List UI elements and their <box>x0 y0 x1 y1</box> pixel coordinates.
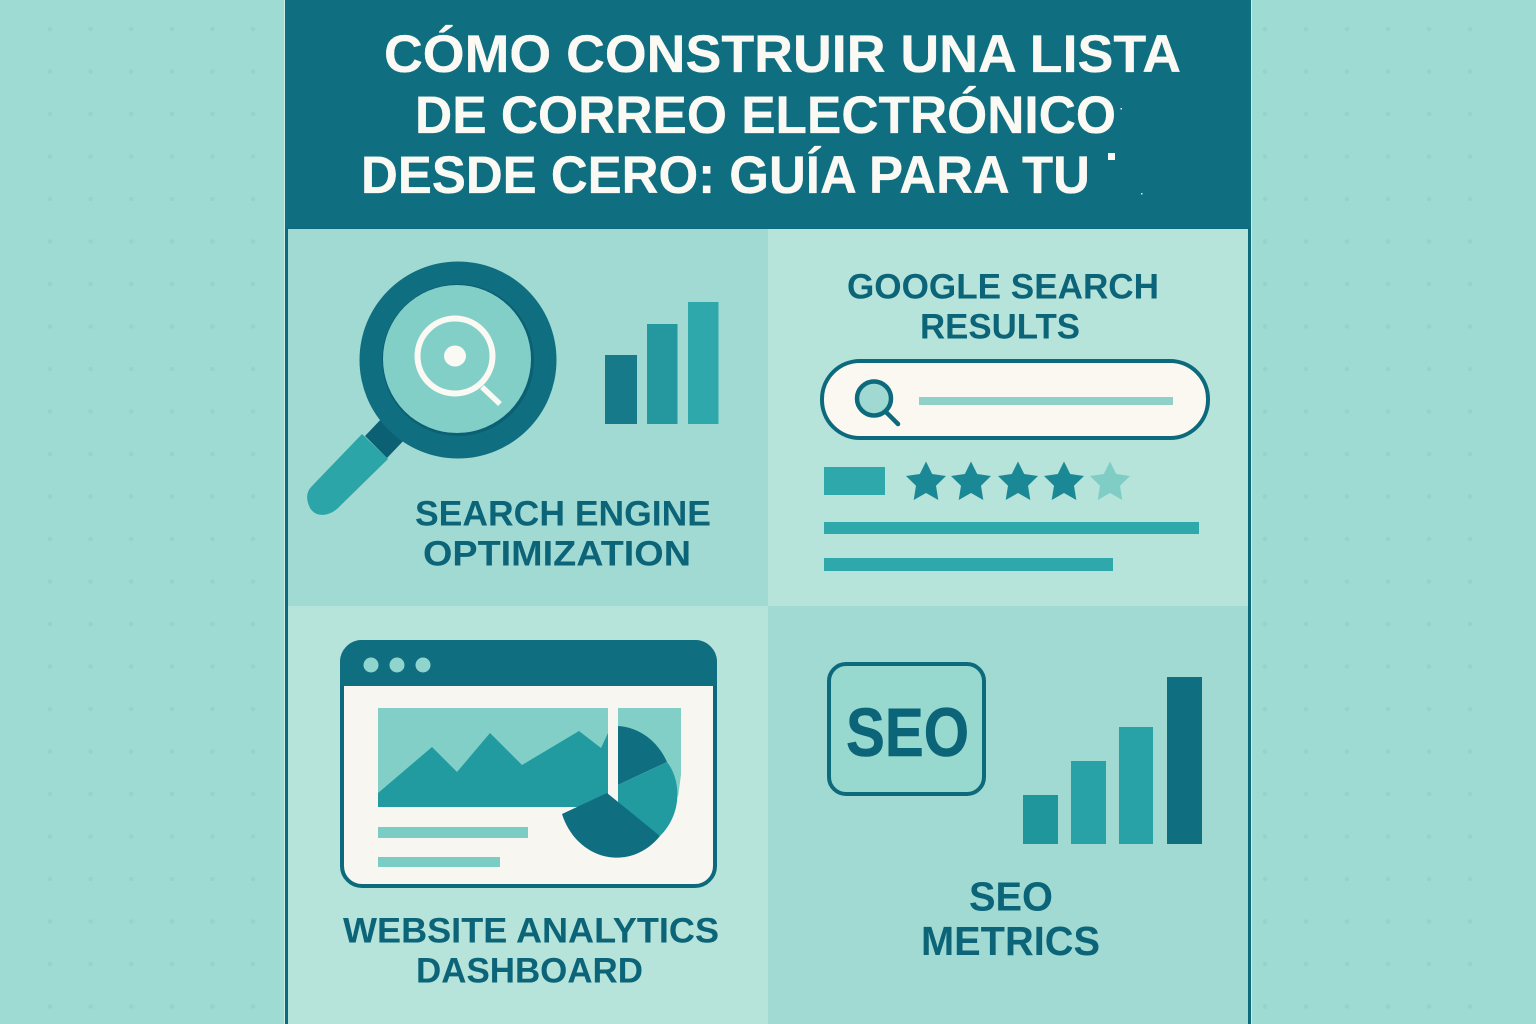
label: seo metrics: SEO <box>969 874 1053 920</box>
label: google search results <box>847 268 1159 346</box>
bar chart: rising bars <box>605 302 718 424</box>
title <box>361 24 1181 205</box>
label: seo metrics: METRICS <box>921 918 1100 964</box>
label: google search results: GOOGLE SEARCH <box>847 268 1159 306</box>
label: website analytics dashboard: WEBSITE ANALYTICS <box>343 912 719 950</box>
result tag <box>824 467 885 495</box>
seo badge <box>829 664 984 794</box>
title: DE CORREO ELECTRÓNICO <box>415 85 1116 145</box>
title: CÓMO CONSTRUIR UNA LISTA <box>384 24 1181 84</box>
area chart <box>378 708 608 807</box>
label: search engine optimization: SEARCH ENGINE <box>415 494 711 534</box>
label: seo metrics <box>921 874 1100 964</box>
panel: seo metrics <box>768 606 1248 1024</box>
panel: search engine optimization <box>288 229 768 606</box>
bar chart: seo growth <box>1023 677 1202 844</box>
panel: website analytics dashboard <box>288 606 768 1024</box>
label: website analytics dashboard: DASHBOARD <box>416 952 643 990</box>
label: google search results: RESULTS <box>920 308 1080 346</box>
pie chart <box>562 708 681 858</box>
label: search engine optimization <box>415 494 711 574</box>
star rating <box>906 462 1130 500</box>
icon: search glass <box>857 382 898 424</box>
label: website analytics dashboard <box>343 912 719 990</box>
seo badge: SEO <box>846 694 969 771</box>
title: DESDE CERO: GUÍA PARA TU <box>361 145 1090 205</box>
result lines <box>824 522 1199 571</box>
search bar <box>822 361 1208 438</box>
icon: magnifying glass <box>307 262 556 515</box>
frame <box>284 0 1252 1024</box>
browser window <box>340 640 717 886</box>
label: search engine optimization: OPTIMIZATION <box>423 534 691 574</box>
header band <box>285 0 1251 228</box>
panel: google search results <box>768 229 1248 606</box>
text lines <box>378 827 528 867</box>
window dots <box>364 658 430 672</box>
